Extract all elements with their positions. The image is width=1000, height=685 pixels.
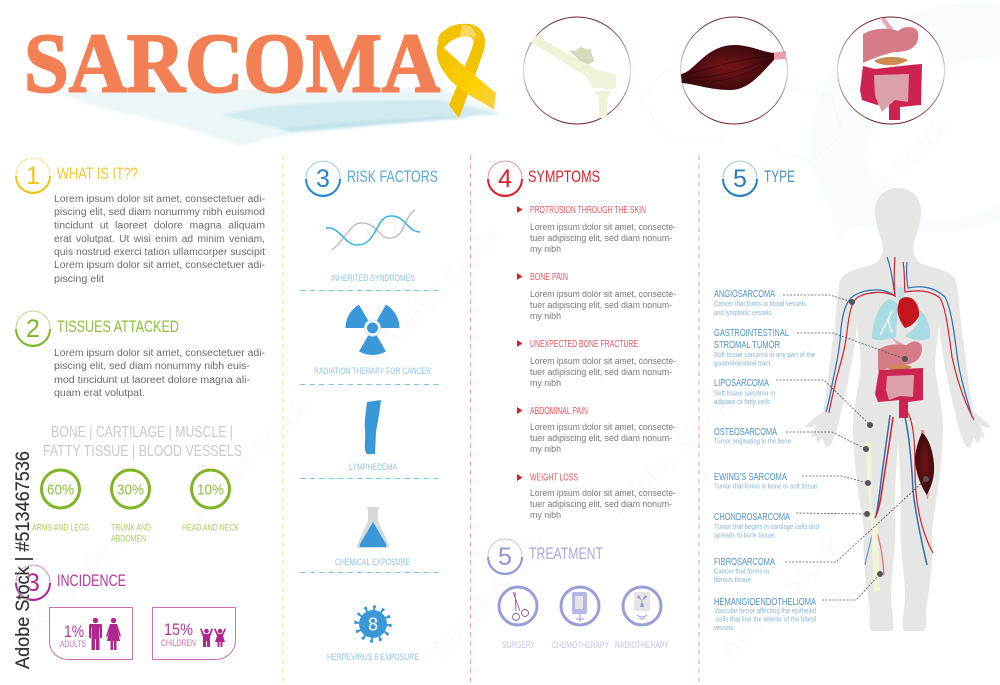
text block [54, 194, 265, 285]
panel: what is it [16, 158, 265, 285]
type: chondrosarcoma: spreads to bone tissue. [714, 530, 776, 540]
stat: 10 percent head and neck: HEAD AND NECK [182, 522, 239, 532]
icon: number 3 [306, 161, 340, 196]
icon: virus: 8 [368, 614, 378, 634]
type: gastrointestinal stromal tumor: STROMAL TUMOR [714, 339, 780, 351]
type: gastrointestinal stromal tumor: GASTROINTESTINAL [714, 327, 789, 339]
symptom: abdominal pain: my nibh [530, 444, 561, 454]
text block [54, 348, 265, 399]
heart [897, 297, 919, 328]
icon: man [89, 618, 102, 650]
stock watermarks: Adobe Stock [603, 390, 737, 524]
icon: number 1: 1 [26, 162, 40, 190]
icon: virus [356, 606, 390, 642]
label: SURGERY [502, 640, 535, 651]
heading: TREATMENT [529, 544, 603, 563]
icon: number 4 [488, 161, 522, 196]
type: liposarcoma: adipose or fatty cells [714, 397, 770, 406]
symptom: abdominal pain [517, 406, 676, 454]
stock watermarks: Adobe Stock [183, 390, 317, 524]
type: liposarcoma: LIPOSARCOMA [714, 377, 769, 389]
symptom: abdominal pain: ABDOMINAL PAIN [530, 406, 588, 417]
tissue list [43, 424, 242, 460]
text block: piscing elit [54, 274, 104, 285]
icon: number 2 [16, 311, 50, 346]
type: hemangioendothelioma: vessels. [714, 623, 735, 632]
symptom: weight loss [517, 472, 676, 520]
stat: 30 percent trunk and abdomen [111, 470, 151, 544]
text block: tincidunt ut laoreet dolore magna aliquam [54, 220, 265, 232]
symptom: weight loss: WEIGHT LOSS [530, 472, 578, 484]
blood vessels [826, 257, 974, 575]
intestines [875, 368, 923, 418]
card: children [152, 608, 236, 660]
icon: number 3 [16, 565, 50, 600]
symptom: bone pain: Lorem ipsum dolor sit amet, consecte- [530, 289, 676, 299]
icon: number 5: 5 [733, 165, 747, 193]
icon: bone tumor circle [524, 17, 630, 124]
card: adults: ADULTS [60, 639, 86, 649]
stock watermarks: Adobe Stock [823, 110, 957, 244]
type: fibrosarcoma: Cancer that forms in [714, 566, 769, 576]
label: RADIATION THERAPY FOR CANCER [314, 366, 431, 376]
type: liposarcoma: Soft tissue sarcoma in [714, 388, 775, 398]
label: RADIOTHERAPY [615, 640, 669, 651]
heading: INCIDENCE [57, 571, 126, 590]
text block: erat volutpat. Ut wisi enim ad minim veniam, [54, 234, 265, 245]
card: children: 15% [164, 620, 193, 639]
stat: 10 percent head and neck: 10% [197, 482, 224, 498]
icon: number 5 [488, 539, 522, 574]
icon: flask [357, 507, 389, 548]
symptom: unexpected bone fracture: my nibh [530, 378, 561, 388]
panel: body diagram [805, 188, 991, 631]
icon: swollen leg [365, 400, 381, 454]
heading: TYPE [764, 167, 795, 186]
symptom: unexpected bone fracture: Lorem ipsum dolor sit amet, consecte- [530, 356, 676, 366]
stock watermarks: Adobe Stock [13, 510, 147, 644]
card: adults [50, 608, 132, 660]
type: gastrointestinal stromal tumor: Soft tissue sarcoma in any part of the [714, 350, 815, 359]
text block: Lorem ipsum dolor sit amet, consectetuer adi- [54, 194, 265, 205]
type: gastrointestinal stromal tumor: gastrointestinal tract. [714, 358, 772, 368]
type: osteosarcoma: Tumor originating in the bone [714, 436, 791, 446]
symptom: bone pain [517, 272, 676, 321]
thigh and shin bone [866, 443, 880, 593]
text block: mod tincidunt ut laoreet dolore magna ali- [54, 375, 250, 386]
symptom: protrusion: PROTRUSION THROUGH THE SKIN [530, 205, 646, 216]
heading: TISSUES ATTACKED [57, 317, 179, 336]
tissue list: BONE | CARTILAGE | MUSCLE | [51, 424, 233, 441]
symptom: bone pain: BONE PAIN [530, 272, 568, 283]
stat: 60 percent arms and legs: ARMS AND LEGS [32, 522, 89, 532]
icon: radiotherapy [623, 587, 661, 625]
symptom: protrusion: tuer adipiscing elit, sed diam nonum- [530, 233, 672, 243]
lungs [872, 299, 930, 340]
type: fibrosarcoma: fibrous tissue [714, 575, 751, 584]
icon: woman [106, 618, 121, 650]
type: hemangioendothelioma [714, 571, 883, 632]
stat: 30 percent trunk and abdomen: 30% [117, 482, 144, 498]
text block: piscing elit, sed diam nonummy nibh euis- [54, 361, 250, 372]
icon: number 5: 5 [498, 543, 512, 571]
heading: SYMPTOMS [528, 167, 600, 186]
watercolor wash under title [55, 88, 501, 146]
type: angiosarcoma: and lymphatic vessels. [714, 308, 773, 317]
symptom: protrusion: Lorem ipsum dolor sit amet, consecte- [530, 222, 676, 232]
icon: number 3: 3 [26, 569, 40, 597]
symptom: weight loss: my nibh [530, 510, 561, 520]
icon: girl [214, 628, 226, 647]
heading: RISK FACTORS [347, 167, 438, 186]
text block: quis nostrud exerci tation ullamcorper suscipit [54, 247, 265, 258]
heading: WHAT IS IT?? [57, 164, 138, 183]
type: fibrosarcoma [714, 476, 929, 584]
symptom: unexpected bone fracture: UNEXPECTED BONE FRACTURE [530, 339, 638, 350]
background swoosh and faint hexagons [640, 2, 1000, 231]
tissue list: FATTY TISSUE | BLOOD VESSELS [43, 443, 242, 460]
stat: 60 percent arms and legs [32, 470, 89, 532]
icon: number 4: 4 [498, 165, 512, 193]
type: angiosarcoma: Cancer that forms in blood vessels [714, 299, 806, 308]
type: ewing's sarcoma: EWING'S SARCOMA [714, 471, 787, 483]
text block: piscing elit, sed diam nonummy nibh euismod [54, 207, 265, 218]
icon: number 2: 2 [26, 315, 40, 343]
symptom: abdominal pain: tuer adipiscing elit, sed diam nonum- [530, 433, 672, 443]
type: hemangioendothelioma: Vascular tumor affecting the epithelial [714, 606, 816, 615]
icon: awareness ribbon [437, 24, 496, 118]
stock watermarks: Adobe Stock [423, 530, 557, 664]
panel: tissues attacked [16, 311, 265, 544]
muscle [915, 430, 934, 499]
panel: type [714, 161, 929, 632]
type: hemangioendothelioma: cells that line the interior of the blood [716, 614, 816, 624]
type: osteosarcoma: OSTEOSARCOMA [714, 426, 777, 438]
icon: number 1 [16, 158, 50, 193]
icon: surgery scissors [499, 587, 537, 625]
liver and stomach [878, 337, 922, 371]
panel: treatment [488, 539, 669, 651]
type: osteosarcoma [714, 426, 869, 452]
panel: incidence [16, 565, 236, 660]
panel: symptoms [488, 161, 676, 520]
panel: risk factors [300, 161, 443, 662]
symptom: unexpected bone fracture [517, 339, 676, 388]
text block: Lorem ipsum dolor sit amet, consectetuer adi- [54, 348, 265, 359]
trachea [897, 287, 904, 300]
type: chondrosarcoma: Tumor that begins in cartilage cells and [714, 522, 819, 531]
symptom: unexpected bone fracture: tuer adipiscing elit, sed diam nonum- [530, 367, 672, 377]
text block: quam erat volutpat. [54, 388, 145, 399]
stock watermarks: Adobe Stock [373, 220, 507, 354]
symptom: weight loss: Lorem ipsum dolor sit amet, consecte- [530, 488, 676, 498]
type: angiosarcoma: ANGIOSARCOMA [714, 288, 775, 300]
icon: number 3: 3 [316, 165, 330, 193]
card: children: CHILDREN [161, 638, 196, 648]
symptom: protrusion: my nibh [530, 244, 561, 254]
type: angiosarcoma [714, 288, 855, 317]
label: HERPEVIRUS 8 EXPOSURE [327, 652, 419, 662]
type: fibrosarcoma: FIBROSARCOMA [714, 556, 775, 568]
icon: dna helix [326, 210, 420, 250]
type: liposarcoma [714, 377, 873, 428]
symptom: weight loss: tuer adipiscing elit, sed diam nonum- [530, 499, 672, 509]
label: CHEMOTHERAPY [552, 640, 609, 651]
symptom: bone pain: tuer adipiscing elit, sed diam nonum- [530, 300, 672, 310]
title: SARCOMA [24, 16, 440, 110]
card: adults: 1% [64, 622, 84, 641]
type: hemangioendothelioma: HEMANGIOENDOTHELIOMA [714, 596, 816, 608]
stat: 30 percent trunk and abdomen: TRUNK AND [111, 522, 151, 532]
label: CHEMICAL EXPOSURE [335, 557, 410, 567]
symptom: protrusion [517, 205, 676, 254]
body silhouette [805, 188, 991, 631]
symptom: bone pain: my nibh [530, 311, 561, 321]
stat: 60 percent arms and legs: 60% [47, 482, 74, 498]
type: gastrointestinal stromal tumor [714, 327, 905, 368]
icon: chemotherapy bag [561, 587, 599, 625]
stat: 30 percent trunk and abdomen: ABDOMEN [111, 534, 146, 544]
icon: radiation [346, 305, 400, 355]
icon: number 5 [723, 161, 757, 196]
column dividers [283, 155, 699, 682]
type: ewing's sarcoma: Tumor that forms in bone or soft tissue. [714, 482, 819, 490]
text block: Lorem ipsum dolor sit amet, consectetuer adi- [54, 260, 265, 271]
type: chondrosarcoma [714, 511, 870, 540]
label: INHERITED SYNDROMES [331, 273, 415, 283]
stock watermarks: Adobe Stock [713, 530, 847, 664]
symptom: abdominal pain: Lorem ipsum dolor sit amet, consecte- [530, 422, 676, 432]
icon: digestive organs circle [838, 17, 944, 124]
type: ewing's sarcoma [714, 471, 871, 490]
stock watermarks [13, 110, 957, 664]
icon: muscle circle [680, 17, 788, 124]
type: chondrosarcoma: CHONDROSARCOMA [714, 511, 790, 523]
icon: boy [200, 628, 213, 647]
vertical stock id: Adobe Stock | #513467536 [13, 451, 34, 669]
stat: 10 percent head and neck [182, 470, 239, 532]
label: LYMPHEDEMA [349, 462, 397, 472]
